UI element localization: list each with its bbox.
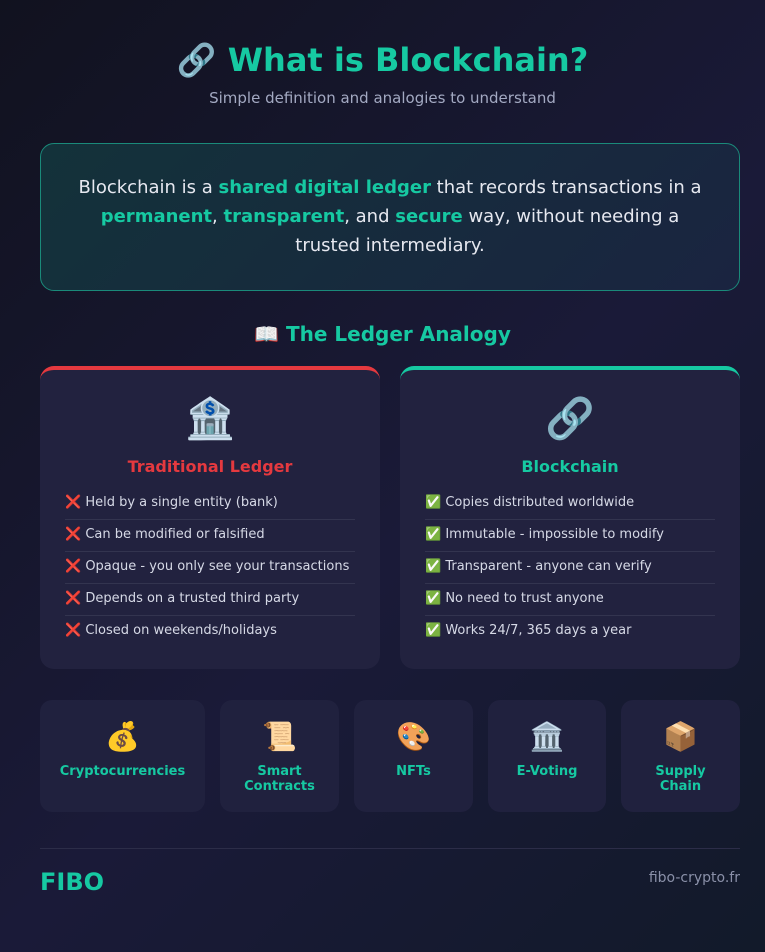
list: blockchain benefits: ✅ Works 24/7, 365 days a year bbox=[425, 623, 631, 638]
use case: e-voting bbox=[488, 700, 606, 812]
use case: cryptocurrencies: 💰 bbox=[105, 720, 140, 753]
heading: blockchain: Blockchain bbox=[521, 457, 619, 476]
icon: link: 🔗 bbox=[545, 396, 595, 442]
list: traditional drawbacks: ❌ Closed on weekends/holidays bbox=[65, 623, 277, 638]
use case: smart contracts bbox=[220, 700, 339, 812]
list: traditional drawbacks: ❌ Opaque - you only see your transactions bbox=[65, 559, 349, 574]
list: blockchain benefits: ✅ Transparent - anyone can verify bbox=[425, 559, 652, 574]
list: traditional drawbacks: ❌ Depends on a trusted third party bbox=[65, 591, 299, 606]
use case: cryptocurrencies bbox=[40, 700, 205, 812]
list: blockchain benefits: ✅ Immutable - impossible to modify bbox=[425, 527, 664, 542]
section heading: ledger analogy: 📖 The Ledger Analogy bbox=[254, 322, 511, 346]
use case: supply chain: 📦 bbox=[663, 720, 698, 753]
list: blockchain benefits: ✅ No need to trust anyone bbox=[425, 591, 604, 606]
use case: supply chain: Chain bbox=[660, 779, 701, 794]
list: blockchain benefits: ✅ Copies distributed worldwide bbox=[425, 495, 634, 510]
use case: NFTs: NFTs bbox=[396, 764, 431, 779]
use case: cryptocurrencies: Cryptocurrencies bbox=[60, 764, 185, 779]
use case: NFTs: 🎨 bbox=[396, 720, 431, 753]
panel: blockchain bbox=[400, 366, 740, 669]
subtitle: Simple definition and analogies to understand bbox=[209, 89, 556, 107]
definition box bbox=[40, 143, 740, 291]
use case: smart contracts: 📜 bbox=[262, 720, 297, 753]
use case: supply chain: Supply bbox=[655, 764, 706, 779]
footer url: fibo-crypto.fr bbox=[649, 870, 740, 886]
list: traditional drawbacks bbox=[65, 494, 355, 638]
use case: supply chain bbox=[621, 700, 740, 812]
footer brand: FIBO bbox=[40, 868, 104, 896]
icon: bank: 🏦 bbox=[185, 396, 235, 442]
panel: traditional ledger bbox=[40, 366, 380, 669]
use case: NFTs bbox=[354, 700, 473, 812]
use case: smart contracts: Contracts bbox=[244, 779, 315, 794]
list: traditional drawbacks: ❌ Can be modified or falsified bbox=[65, 527, 265, 542]
list: traditional drawbacks: ❌ Held by a single entity (bank) bbox=[65, 495, 278, 510]
use case: e-voting: E-Voting bbox=[517, 764, 577, 779]
heading: traditional ledger: Traditional Ledger bbox=[128, 457, 292, 476]
title: 🔗 What is Blockchain? bbox=[177, 41, 588, 79]
use case: e-voting: 🏛️ bbox=[530, 720, 564, 753]
list: blockchain benefits bbox=[425, 494, 715, 638]
use case: smart contracts: Smart bbox=[257, 764, 302, 779]
definition box: Blockchain is a shared digital ledger that records transactions in a permanent, transparent, and secure way, without needing a trusted intermediary. bbox=[78, 177, 702, 256]
